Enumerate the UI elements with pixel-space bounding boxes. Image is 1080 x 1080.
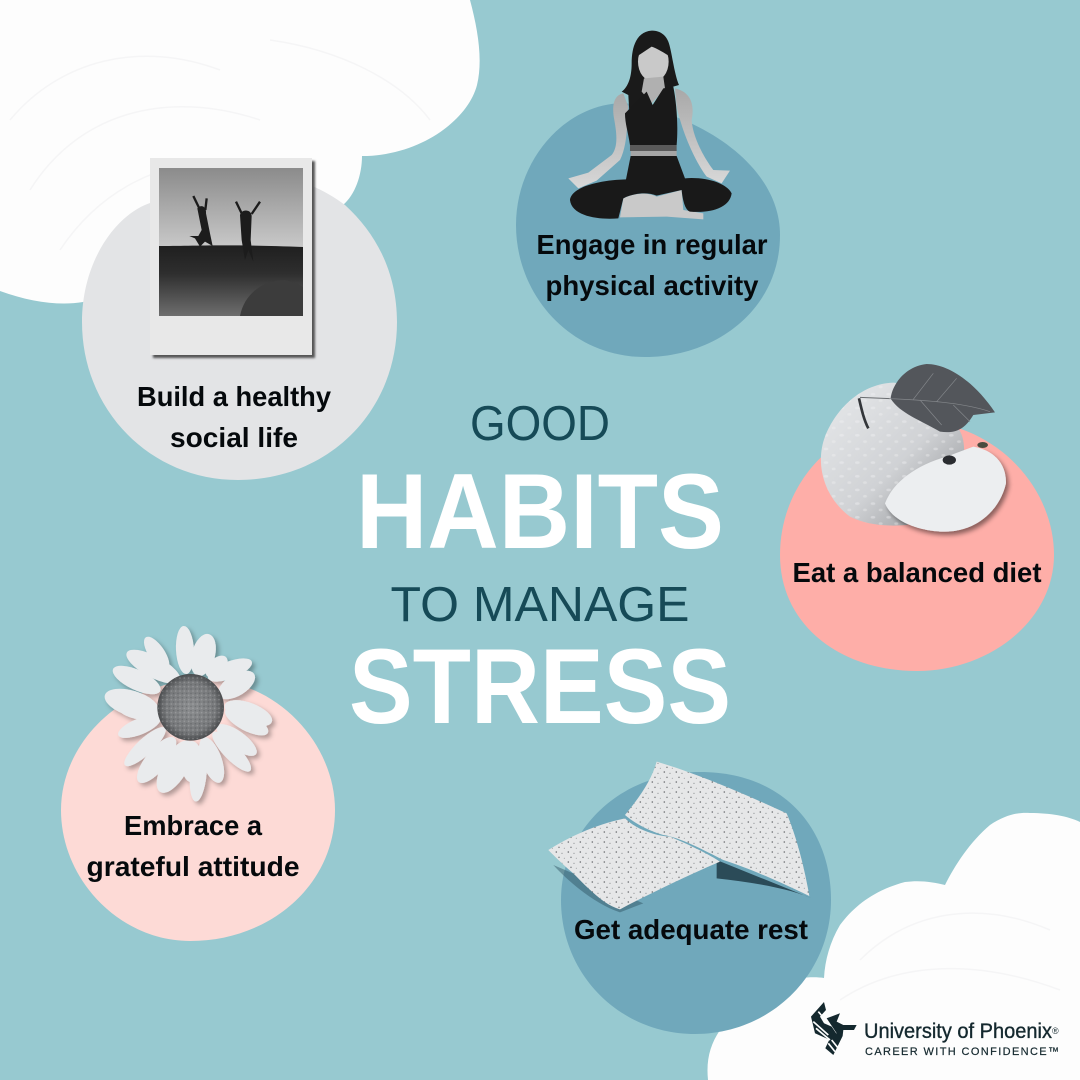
circle: social life <box>82 172 397 480</box>
panel: social life <box>82 158 397 480</box>
circle: grateful attitude <box>61 679 335 941</box>
label: embrace a grateful attitude: grateful attitude <box>86 851 300 882</box>
icon: polaroid photo <box>150 158 315 358</box>
title line: stress: STRESS <box>349 626 731 746</box>
label: embrace a grateful attitude: Embrace a <box>124 810 262 841</box>
icon: daisy flower <box>101 626 275 802</box>
circle: balanced diet <box>780 420 1054 671</box>
circle: physical activity <box>516 103 780 357</box>
panel: adequate rest <box>548 762 831 1034</box>
logo tagline: CAREER WITH CONFIDENCE™ <box>865 1046 1059 1058</box>
panel: physical activity <box>516 31 780 357</box>
title line: good: GOOD <box>470 397 610 451</box>
registered mark: ® <box>1052 1026 1059 1036</box>
panel: grateful attitude <box>61 626 335 941</box>
title <box>349 397 731 746</box>
decorative cloud: bottom right <box>708 813 1080 1080</box>
logo: University of Phoenix <box>811 1002 1059 1058</box>
label: get adequate rest: Get adequate rest <box>574 914 808 945</box>
title line: to manage: TO MANAGE <box>390 578 690 632</box>
panel: balanced diet <box>780 364 1054 671</box>
title line: habits: HABITS <box>356 451 724 571</box>
decorative cloud: top left <box>0 0 480 304</box>
logo wordmark: University of Phoenix <box>864 1019 1052 1043</box>
label: engage in regular physical activity: physical activity <box>546 270 759 301</box>
label: build a healthy social life: social life <box>170 422 298 453</box>
icon: meditating woman <box>568 31 732 219</box>
icon: apple and leaf <box>821 364 1006 532</box>
circle: adequate rest <box>561 772 831 1034</box>
label: engage in regular physical activity: Engage in regular <box>536 229 768 260</box>
label: build a healthy social life: Build a healthy <box>137 381 331 412</box>
icon: phoenix mark <box>811 1002 857 1055</box>
label: eat a balanced diet: Eat a balanced diet <box>792 557 1042 588</box>
icon: pillows <box>548 762 812 912</box>
